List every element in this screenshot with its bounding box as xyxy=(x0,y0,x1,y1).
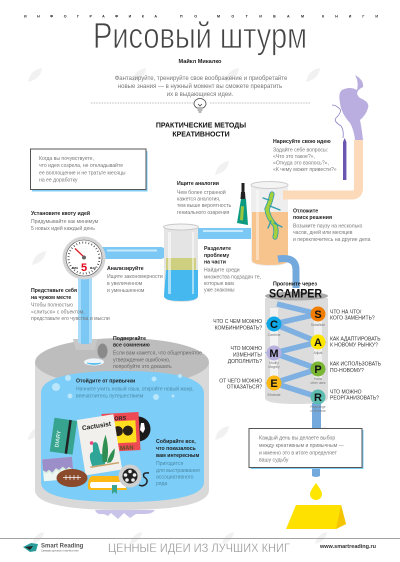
pipe: below scamper xyxy=(312,403,321,429)
text: doubt: Если вам кажется, что общепринятое xyxy=(113,350,202,356)
footer line xyxy=(0,537,400,540)
scamper heading: SCAMPER xyxy=(269,286,322,300)
scamper circles: Magnify xyxy=(268,365,280,369)
scamper questions right: ЧТО НА ЧТО/ xyxy=(330,310,362,316)
text: draw your idea: «К чему может привести?» xyxy=(273,167,337,173)
icon: diary: DIARY xyxy=(54,430,63,448)
scamper questions left: ИЗМЕНИТЬ/ xyxy=(233,352,263,358)
text: doubt: утверждение ошибочно, xyxy=(113,358,170,364)
text: analogies xyxy=(177,181,231,216)
scamper circles: Combine xyxy=(268,333,281,337)
icon: pencil xyxy=(343,138,346,180)
scamper circles: Adjust xyxy=(314,351,323,355)
text: postpone xyxy=(293,208,371,243)
text: put yourself xyxy=(31,287,110,322)
pipe: to drop xyxy=(312,469,320,477)
smoke xyxy=(339,75,368,140)
scamper circles: S xyxy=(314,309,322,321)
text: habits xyxy=(76,378,194,400)
scamper circles: other uses xyxy=(311,381,326,385)
text: analogies: Чем более странной xyxy=(177,189,226,196)
supertitle: МОТИВАМ xyxy=(217,14,304,18)
callout: top: что идея созрела, не откладывайте xyxy=(39,162,123,169)
intro text: новые знания — в нужный момент вы сможете превратить xyxy=(118,83,282,90)
text: doubt: все сомнению xyxy=(113,342,150,348)
icon: gold bar xyxy=(286,505,346,529)
intro text: Фантазируйте, тренируйте свое воображение и приобретайте xyxy=(115,75,288,82)
pipe: beaker to cylinder xyxy=(198,228,252,239)
text: analogies: гениального озарения xyxy=(177,210,230,216)
supertitle: ПО xyxy=(180,14,197,18)
scamper questions right: КАК АДАПТИРОВАТЬ xyxy=(330,336,381,342)
text: split problem: проблему xyxy=(204,252,229,259)
text: split problem: уже знакомы xyxy=(204,288,235,294)
text: analyze: Ищите закономерности xyxy=(107,274,163,280)
text: collect: что показалось xyxy=(156,446,196,452)
text: draw your idea: Нарисуйте свою идею xyxy=(273,138,331,145)
pipe: gauge to beaker xyxy=(98,247,166,259)
icon: yellow book xyxy=(88,476,127,494)
text: habits: Начните учить новый язык, откройте новый жанр, xyxy=(76,386,194,392)
text: split problem: на части xyxy=(204,260,226,266)
text: draw your idea: Задайте себе вопросы: xyxy=(273,146,328,154)
text: idea quota: 5 новых идей каждый день xyxy=(31,225,95,232)
title: Рисовый штурм xyxy=(93,15,307,56)
icon: diary xyxy=(50,418,77,455)
callout: bottom: Каждый день вы делаете выбор xyxy=(259,434,335,442)
scamper questions left xyxy=(213,319,263,390)
text: put yourself: представьте его чувства и мысли xyxy=(31,316,110,322)
icon: lizard xyxy=(263,194,282,237)
cylinder: orange xyxy=(251,182,288,266)
text: analogies: кажется аналогия, xyxy=(177,196,220,202)
callout: bottom: и именно это в итоге определяет xyxy=(259,450,338,456)
text: split problem: Разделите xyxy=(204,246,231,252)
scamper questions left: ЧТО МОЖНО xyxy=(230,346,262,352)
scamper questions left: КОМБИНИРОВАТЬ? xyxy=(215,326,262,332)
scamper circles: Put to xyxy=(314,377,322,381)
scamper circles: Eliminate xyxy=(267,393,281,397)
scamper questions left: ЧТО С ЧЕМ МОЖНО xyxy=(213,319,262,325)
callout: top: на ее доработку xyxy=(39,178,78,184)
text: doubt: попробуйте это доказать xyxy=(113,363,172,370)
scamper circles: or Reverse xyxy=(310,409,326,413)
callout: bottom: вашу судьбу xyxy=(259,458,289,464)
text: collect: ряда xyxy=(156,481,168,487)
text: analyze: и уменьшенном xyxy=(107,288,145,294)
supertitle: ИНФОГРАФИКА xyxy=(24,14,157,18)
icon: gauge: МИН xyxy=(72,266,78,270)
scamper heading: Прогоните через xyxy=(273,282,317,288)
scamper questions right: РЕОРГАНИЗОВАТЬ? xyxy=(330,396,379,402)
icon: mountain card xyxy=(42,457,74,481)
text: draw your idea: «Откуда это взялось?», xyxy=(273,160,329,166)
text: split problem: которые вам xyxy=(204,281,234,287)
icon: drop xyxy=(310,483,322,500)
thin smoke xyxy=(332,105,343,138)
text: analogies: Ищите аналогии xyxy=(177,181,219,187)
methods heading: ПРАКТИЧЕСКИЕ МЕТОДЫ xyxy=(156,122,246,130)
scamper circles: Modify xyxy=(269,361,279,365)
icon: football xyxy=(56,469,88,487)
icon: glue tube xyxy=(237,183,248,225)
text: split problem xyxy=(204,246,261,294)
text: habits: впечатлитесь путешествием xyxy=(76,394,144,400)
text: split problem: множества подзадач те, xyxy=(204,274,261,280)
text: draw your idea: «Что это такое?», xyxy=(273,154,315,160)
scamper questions right: КАК ИСПОЛЬЗОВАТЬ xyxy=(330,362,382,368)
text: put yourself: «слиться» с объектом, xyxy=(31,310,85,316)
beaker: left xyxy=(164,224,198,302)
text: collect: вам интересным xyxy=(156,453,199,459)
scamper circles: R xyxy=(314,392,322,404)
logo: Smart Reading xyxy=(41,544,84,550)
scamper questions left: ОТ ЧЕГО МОЖНО xyxy=(219,378,262,384)
text: doubt: Подвергайте xyxy=(113,335,146,342)
text: postpone: часов, дней или месяцев xyxy=(293,229,353,236)
scamper questions right: ЧТО МОЖНО xyxy=(330,390,362,396)
callout: top: ее воплощение и не тратьте месяцы xyxy=(39,170,126,176)
text: idea quota: Установите квоту идей xyxy=(31,210,90,217)
pipe: orange to smoke xyxy=(283,140,358,195)
scamper circles xyxy=(266,306,326,413)
scamper questions right: К НОВОМУ РЫНКУ? xyxy=(330,342,378,348)
text: put yourself: на чужом месте xyxy=(31,295,71,301)
text: analogies: тем выше вероятность xyxy=(177,203,231,209)
methods heading: КРЕАТИВНОСТИ xyxy=(172,132,230,138)
footer slogan: ЦЕННЫЕ ИДЕИ ИЗ ЛУЧШИХ КНИГ xyxy=(108,541,290,555)
text: postpone: Отложите xyxy=(293,208,318,214)
supertitle xyxy=(24,14,378,18)
icon: cactus card: Cactusist xyxy=(82,421,112,432)
text: postpone: поиск решения xyxy=(293,215,332,221)
text: habits: Отойдите от привычки xyxy=(76,378,135,384)
text: analyze xyxy=(107,265,163,294)
text: analyze: в увеличенном xyxy=(107,281,143,287)
text: split problem: Найдите среди xyxy=(204,266,240,274)
text: postpone: и переключитесь на другие дела xyxy=(293,237,371,243)
text: collect: Собирайте все, xyxy=(156,438,196,445)
icon: poster xyxy=(102,412,141,453)
intro text xyxy=(115,75,288,98)
text: put yourself: Чтобы полностью xyxy=(31,302,73,308)
text: doubt xyxy=(113,335,202,370)
icon: poster: MAN xyxy=(120,445,134,452)
scamper circles: Substitute xyxy=(311,323,325,327)
author: Майкл Микалко xyxy=(179,58,222,65)
callout: bottom: между креативным и привычным — xyxy=(259,443,345,449)
text: collect: для выстраивания xyxy=(156,468,200,474)
callout: bottom xyxy=(249,428,364,469)
icon: gauge xyxy=(62,236,106,280)
icon: vinyl xyxy=(126,416,150,442)
pipe: gauge to tank xyxy=(78,276,92,345)
scamper circles: P xyxy=(314,364,322,376)
text: collect: ассоциативного xyxy=(156,474,194,480)
scamper cylinder xyxy=(265,292,328,404)
scamper questions right xyxy=(330,310,382,402)
icon: gauge: 5 xyxy=(81,262,87,274)
icon: gauge: МАХ xyxy=(90,266,96,270)
scamper circles: M xyxy=(269,348,279,360)
valve xyxy=(73,330,108,366)
scamper circles: C xyxy=(270,319,278,331)
scamper questions left: ДОПОЛНИТЬ? xyxy=(228,359,262,365)
logo xyxy=(23,543,84,552)
logo: Саммари деловых и научных книг xyxy=(41,550,79,552)
scamper zigzag xyxy=(274,304,318,397)
scamper circles: E xyxy=(270,378,278,390)
text: postpone: Возьмите паузу на несколько xyxy=(293,224,363,230)
flame under tank xyxy=(95,510,155,519)
scamper questions right: КОГО ЗАМЕНИТЬ? xyxy=(330,316,375,322)
scamper circles: Rearrange xyxy=(310,405,326,409)
text: put yourself: Представьте себя xyxy=(31,287,77,294)
icon: light bulb xyxy=(194,99,206,112)
pipe: to scamper xyxy=(278,258,296,288)
methods heading xyxy=(156,122,246,138)
text: idea quota: Придумывайте как минимум xyxy=(31,218,99,225)
text: collect: Пригодится xyxy=(156,461,183,467)
text: analyze: Анализируйте xyxy=(107,265,144,272)
text: collect xyxy=(156,438,200,487)
icon: poster: ORS xyxy=(114,416,127,422)
icon: film reel xyxy=(118,464,149,488)
website: www.smartreading.ru xyxy=(319,544,376,550)
text: idea quota xyxy=(31,210,99,232)
scamper questions left: ОТКАЗАТЬСЯ? xyxy=(227,384,262,390)
intro text: их в выдающиеся идеи. xyxy=(167,92,234,98)
tank xyxy=(35,338,209,510)
icon: cactus card xyxy=(77,414,122,475)
scamper circles: A xyxy=(314,337,322,349)
text: draw your idea xyxy=(273,138,337,173)
supertitle: КНИГИ xyxy=(322,14,378,18)
scamper heading xyxy=(269,282,322,300)
callout: top xyxy=(30,149,148,192)
scamper questions right: ПО-НОВОМУ? xyxy=(330,368,364,374)
tank bubbles xyxy=(52,374,182,400)
callout: top: Когда вы почувствуете, xyxy=(39,156,94,162)
